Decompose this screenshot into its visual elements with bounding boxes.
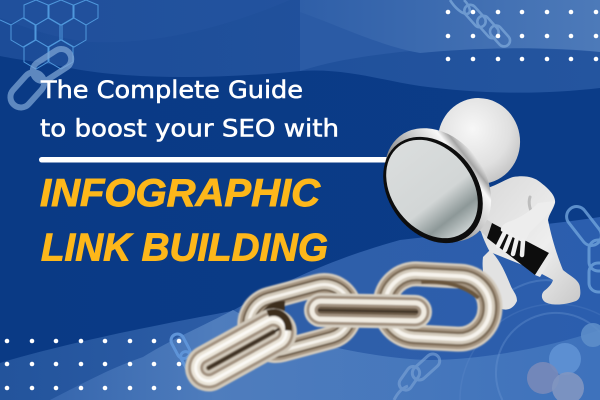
divider line	[39, 157, 389, 162]
magnifier handle	[477, 219, 553, 277]
chain link upper middle	[243, 278, 357, 358]
bottom wave shapes	[0, 217, 600, 400]
headline	[40, 172, 328, 270]
icon: link chain top right	[450, 0, 512, 49]
metal chain	[188, 272, 492, 386]
chain link right	[383, 272, 492, 341]
headline line 2: LINK BUILDING	[41, 226, 328, 270]
title line 2: to boost your SEO with	[40, 114, 339, 142]
white 3D figure with magnifying glass	[363, 92, 580, 310]
decorative rings and bubbles	[460, 280, 600, 400]
headline line 1: INFOGRAPHIC	[40, 172, 321, 215]
figure arm and hand	[498, 201, 555, 255]
figure shoulder shading	[529, 197, 533, 214]
chain link centre	[312, 301, 424, 321]
icon: chain bottom centre	[394, 351, 443, 400]
dot grid top right	[446, 10, 598, 61]
hexagon network	[0, 0, 98, 69]
chain link front left	[188, 307, 295, 386]
figure rear leg	[483, 250, 517, 310]
magnifier lens and rim	[363, 107, 513, 263]
dot grid bottom left	[5, 339, 181, 390]
icon: small chain bottom left	[169, 332, 197, 372]
title lines	[40, 76, 339, 142]
title line 1: The Complete Guide	[40, 76, 303, 104]
figure body and front leg	[475, 176, 580, 305]
figure head	[431, 92, 527, 190]
icon: link chain top left	[6, 45, 75, 112]
top wave shapes	[0, 0, 600, 93]
icon: chain right edge	[563, 203, 600, 292]
